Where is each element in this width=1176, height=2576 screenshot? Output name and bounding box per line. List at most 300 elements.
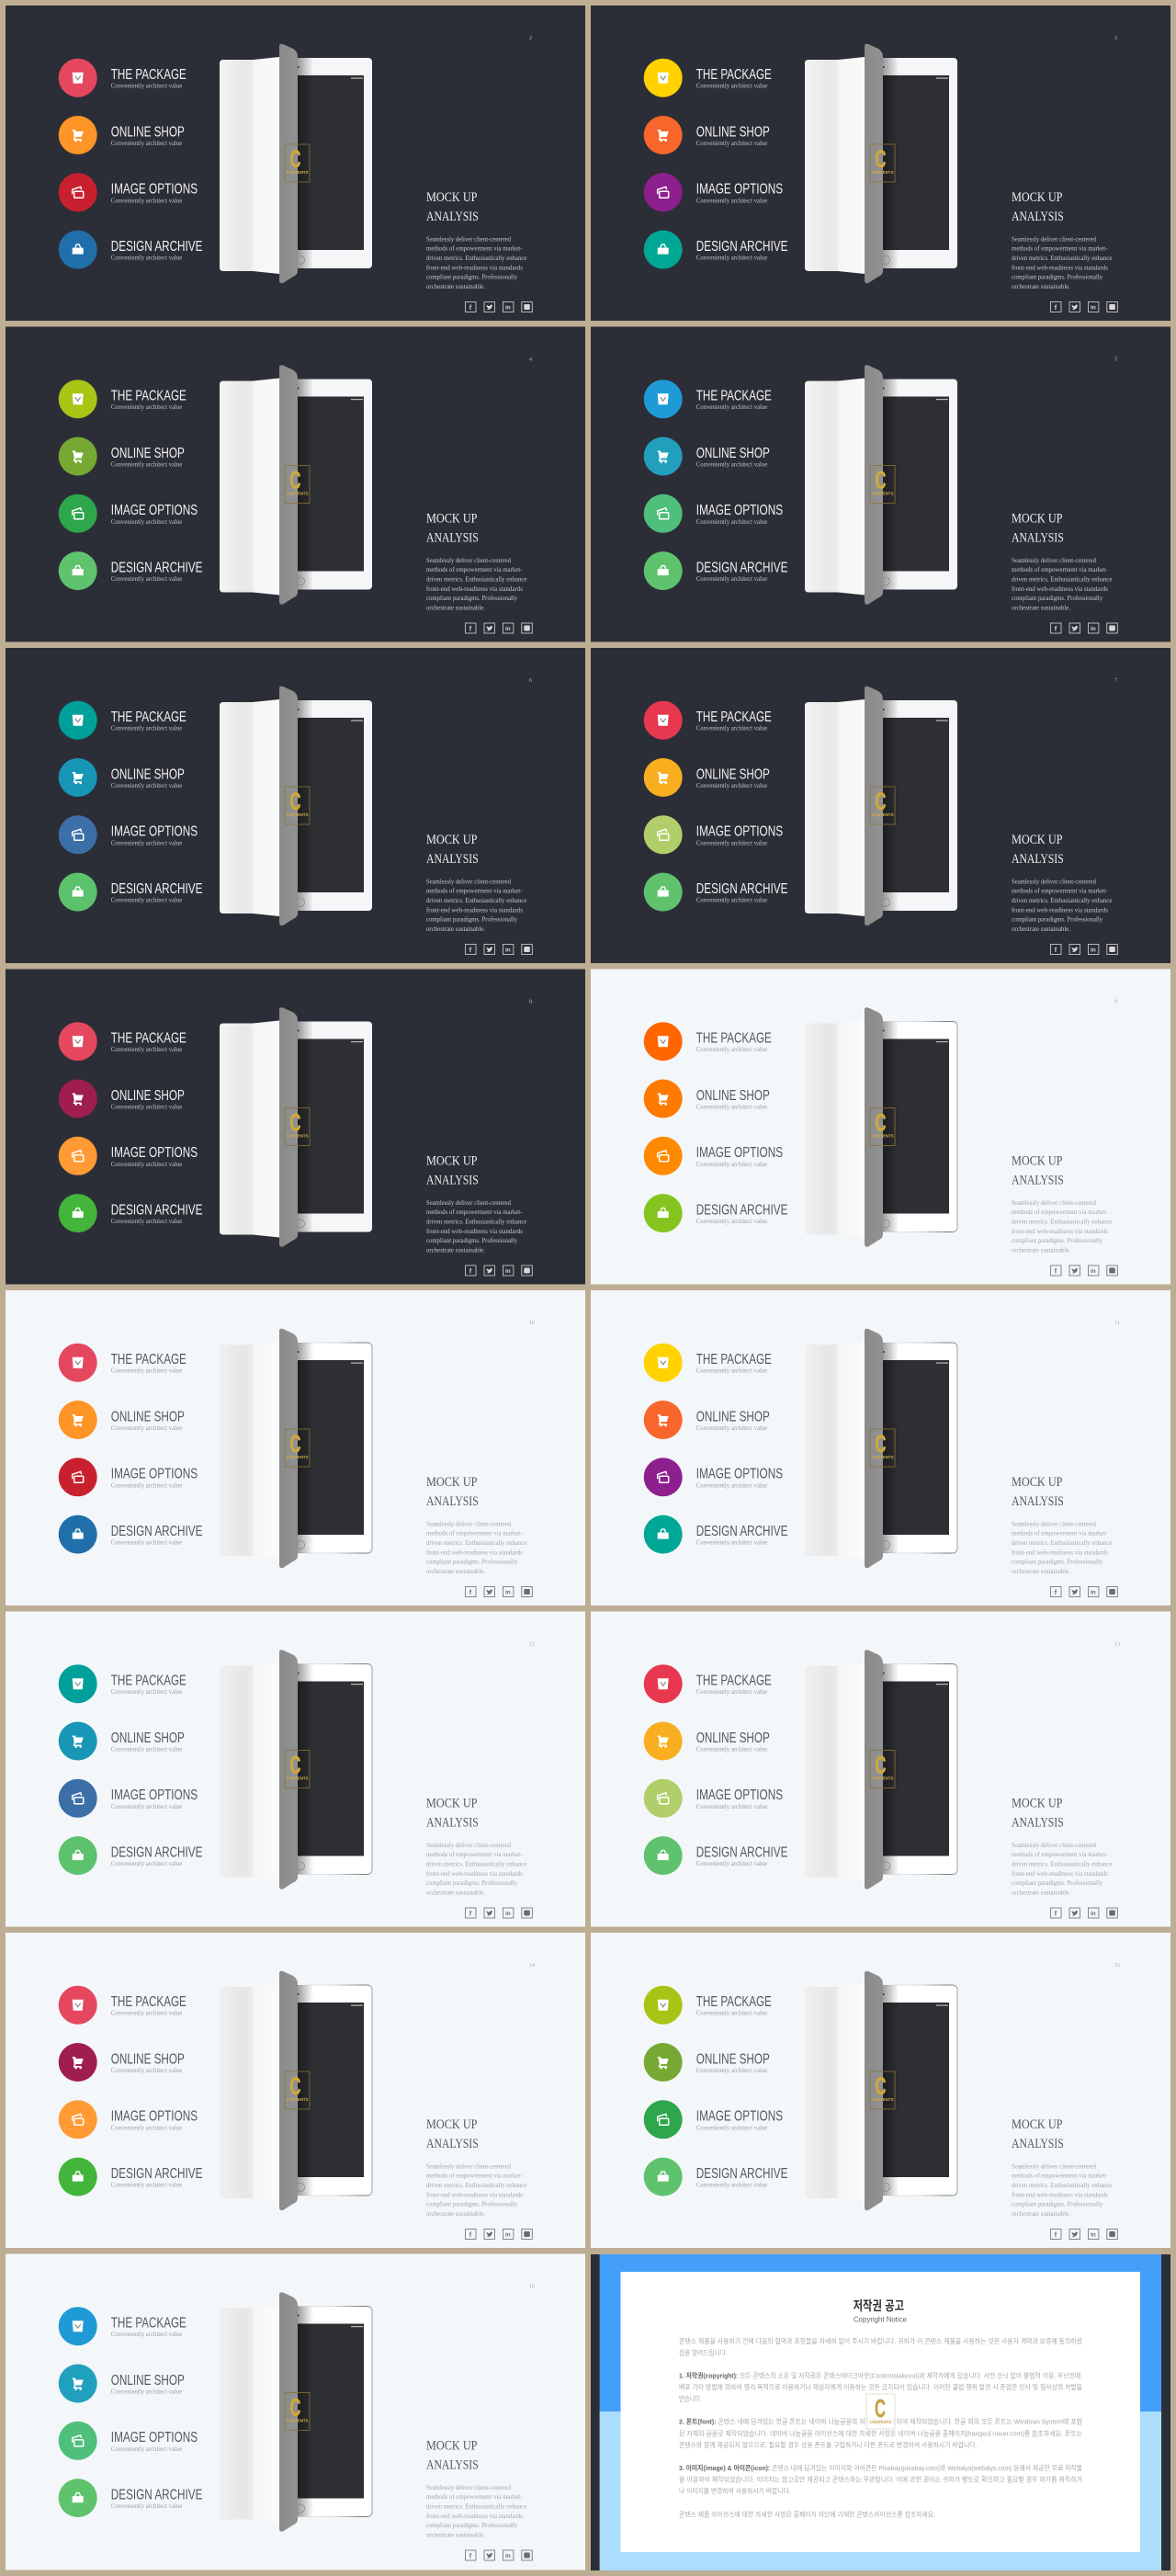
tablet mockup [220, 2292, 372, 2532]
text block: mock up analysis: MOCK UP [1012, 833, 1062, 847]
icon row: the package: Conveniently architect value [696, 2010, 767, 2017]
text block: mock up analysis: Seamlessly deliver client-centered [426, 1841, 511, 1849]
panel: slide 16 light [6, 2253, 585, 2570]
social icons [465, 1586, 532, 1597]
icon row: design archive: DESIGN ARCHIVE [111, 1844, 202, 1860]
icon row: online shop: Conveniently architect value [111, 2388, 182, 2395]
icon row: online shop [644, 1401, 770, 1439]
tablet mockup [805, 1650, 957, 1889]
panel: copyright notice [591, 2254, 1170, 2570]
title: copyright notice: Copyright Notice [854, 2314, 907, 2323]
icon row: the package: Conveniently architect value [111, 2331, 182, 2338]
icon row: design archive: Conveniently architect value [111, 2182, 182, 2189]
text block: mock up analysis: MOCK UP [1012, 1796, 1062, 1810]
text block: mock up analysis: ANALYSIS [1012, 1173, 1064, 1187]
icon row: online shop: ONLINE SHOP [696, 1409, 770, 1424]
icon row: design archive: Conveniently architect value [696, 1218, 767, 1225]
text block: mock up analysis: compliant paradigms. Professionally [426, 273, 517, 281]
text block: license note: 콘텐스 제품 라이선스에 대한 자세한 사항은 홈페이지 하단에 기재한 콘텐스라이선스를 참조하세요. [679, 2509, 935, 2518]
text block: mock up analysis: Seamlessly deliver client-centered [1012, 1841, 1096, 1849]
text block: mock up analysis: compliant paradigms. Professionally [426, 915, 517, 924]
panel: slide 11 light: 11 [1114, 1321, 1120, 1326]
icon row: online shop: Conveniently architect value [696, 1424, 767, 1432]
icon row: design archive: Conveniently architect value [111, 255, 182, 262]
text block: mock up analysis [426, 2439, 527, 2538]
text block: mock up analysis: orchestrate sustainable. [426, 2531, 485, 2538]
text block: mock up analysis: methods of empowerment via market- [426, 2172, 523, 2180]
text block: mock up analysis: methods of empowerment via market- [1012, 887, 1108, 895]
panel: slide 7 dark: 7 [1114, 678, 1117, 684]
icon row: image options: IMAGE OPTIONS [696, 1787, 783, 1803]
icon row: image options: IMAGE OPTIONS [111, 824, 198, 840]
text block: mock up analysis: methods of empowerment via market- [1012, 244, 1108, 253]
icon row: the package [644, 380, 772, 418]
text block: mock up analysis: ANALYSIS [1012, 852, 1064, 867]
text block: mock up analysis: front-end web-readiness via standards [1012, 2190, 1108, 2198]
text block: mock up analysis: front-end web-readiness via standards [426, 263, 523, 271]
text block: mock up analysis: Seamlessly deliver client-centered [426, 877, 511, 885]
icon row: image options [644, 1137, 783, 1175]
icon row: the package: THE PACKAGE [111, 709, 187, 725]
icon row: the package: THE PACKAGE [696, 1352, 772, 1367]
icon row: image options: IMAGE OPTIONS [111, 1145, 198, 1161]
icon row: online shop: ONLINE SHOP [111, 124, 185, 140]
icon row: online shop: Conveniently architect value [696, 461, 767, 469]
text block: mock up analysis: ANALYSIS [1012, 1816, 1064, 1831]
icon row: online shop: ONLINE SHOP [111, 446, 185, 461]
text block: mock up analysis [426, 1154, 527, 1254]
icon row: the package: THE PACKAGE [111, 1673, 187, 1689]
text block: mock up analysis [426, 833, 527, 933]
text block: mock up analysis: compliant paradigms. Professionally [426, 594, 517, 602]
icon row: image options: Conveniently architect value [111, 197, 182, 204]
icon row: online shop [644, 2043, 770, 2082]
panel: slide 11 light [591, 1290, 1170, 1606]
icon row: the package [59, 1986, 187, 2025]
text block: mock up analysis: driven metrics. Enthusiastically enhance [1012, 254, 1113, 262]
text block: mock up analysis: front-end web-readiness via standards [426, 1227, 523, 1235]
icon row: the package [59, 59, 187, 97]
text block: mock up analysis: MOCK UP [426, 1796, 478, 1810]
icon row: design archive [644, 1515, 787, 1554]
icon row: online shop: ONLINE SHOP [111, 1731, 185, 1746]
text block: mock up analysis: Seamlessly deliver client-centered [426, 556, 511, 564]
text block: mock up analysis: Seamlessly deliver client-centered [426, 2483, 511, 2491]
text block: mock up analysis: MOCK UP [1012, 1475, 1062, 1490]
text block: mock up analysis: methods of empowerment via market- [426, 2492, 523, 2501]
text block: mock up analysis: compliant paradigms. Professionally [426, 2200, 517, 2208]
logo stamp: CONTENTS [870, 2420, 891, 2424]
text block: mock up analysis: methods of empowerment via market- [426, 887, 523, 895]
icon row: online shop [59, 2364, 185, 2402]
panel: slide 4 dark [6, 327, 585, 641]
icon row: image options [59, 2100, 198, 2139]
text block: mock up analysis: Seamlessly deliver client-centered [426, 2162, 511, 2170]
text block: mock up analysis [426, 1796, 527, 1897]
icon row: the package: Conveniently architect value [111, 403, 182, 411]
icon row: image options [59, 173, 198, 211]
icon row: image options: Conveniently architect value [696, 1481, 767, 1489]
text block: mock up analysis: ANALYSIS [1012, 210, 1064, 224]
text block: mock up analysis: orchestrate sustainable. [426, 603, 485, 612]
icon row: online shop: ONLINE SHOP [111, 1409, 185, 1424]
icon row: image options: IMAGE OPTIONS [111, 2109, 198, 2125]
text block: mock up analysis: ANALYSIS [426, 1816, 479, 1831]
text block: font clause: 2. 폰트(font): 콘텐스 내에 담겨있는 한글 폰트는 네이버 나눔글꼴의 저작물을 이용하여 제작되었습니다. 한글 외의 모든 폰트는 Windows System에 포함 [679, 2417, 1082, 2426]
text block: copyright clause: 1. 저작권(copyright): 모든 콘텐스의 소유 및 저작권은 콘텐스테이크아웃(Contentstakeout)과 제작자에게 있습니다. 사전 승낙 없이 불법적 이용, 부난전매, [679, 2371, 1082, 2380]
icon row: the package: Conveniently architect value [696, 1367, 767, 1375]
text block: mock up analysis: orchestrate sustainable. [426, 282, 485, 290]
icon row: image options: Conveniently architect value [111, 518, 182, 526]
icon row: design archive: DESIGN ARCHIVE [111, 1524, 202, 1539]
icon row: the package [644, 701, 772, 740]
icon row: design archive: DESIGN ARCHIVE [111, 1202, 202, 1218]
icon row: online shop: Conveniently architect value [696, 140, 767, 147]
icon row: online shop [644, 1722, 770, 1761]
icon row: design archive: DESIGN ARCHIVE [696, 1524, 787, 1539]
panel: slide 10 light [6, 1290, 585, 1606]
text block: mock up analysis: ANALYSIS [426, 1173, 479, 1187]
icon row: image options: Conveniently architect value [111, 1481, 182, 1489]
text block: mock up analysis: Seamlessly deliver client-centered [1012, 877, 1096, 885]
text block: mock up analysis: ANALYSIS [426, 2137, 479, 2151]
text block: mock up analysis: methods of empowerment via market- [1012, 1850, 1108, 1858]
text block: mock up analysis: MOCK UP [426, 190, 478, 205]
text block: mock up analysis: compliant paradigms. Professionally [1012, 594, 1102, 602]
text block: mock up analysis: orchestrate sustainable. [426, 925, 485, 933]
text block: mock up analysis: Seamlessly deliver client-centered [1012, 2162, 1096, 2170]
text block: mock up analysis: methods of empowerment via market- [426, 1208, 523, 1216]
icon row: design archive: DESIGN ARCHIVE [696, 1844, 787, 1860]
text block: copyright clause: 받습니다. [679, 2394, 702, 2403]
icon row: the package: THE PACKAGE [696, 1673, 772, 1689]
text block: mock up analysis: MOCK UP [1012, 1154, 1062, 1169]
text block: mock up analysis: ANALYSIS [1012, 531, 1064, 546]
tablet mockup [805, 44, 957, 283]
icon row: online shop: Conveniently architect value [111, 461, 182, 469]
text block: mock up analysis: front-end web-readiness via standards [1012, 1548, 1108, 1556]
text block: mock up analysis: front-end web-readiness via standards [426, 905, 523, 914]
tablet mockup [805, 687, 957, 925]
text block: mock up analysis: MOCK UP [1012, 2117, 1062, 2132]
text block: mock up analysis: Seamlessly deliver client-centered [1012, 1198, 1096, 1207]
text block: mock up analysis: MOCK UP [426, 2439, 478, 2454]
panel: slide 3 dark: 3 [1114, 36, 1117, 41]
icon row: online shop [59, 116, 185, 154]
text block: mock up analysis [426, 1475, 527, 1575]
icon row: the package [59, 701, 187, 740]
panel: slide 3 dark [591, 6, 1170, 321]
icon row: the package [644, 1986, 772, 2025]
icon row: the package: Conveniently architect value [696, 1688, 767, 1696]
icon row: image options [59, 2422, 198, 2460]
icon row: online shop: ONLINE SHOP [696, 124, 770, 140]
text block: mock up analysis: orchestrate sustainable. [1012, 282, 1070, 290]
icon row: image options [644, 1458, 783, 1496]
text block: mock up analysis: front-end web-readiness via standards [1012, 905, 1108, 914]
icon row: design archive: Conveniently architect value [111, 2502, 182, 2510]
icon row: image options: IMAGE OPTIONS [696, 824, 783, 840]
panel: slide 12 light: 12 [529, 1641, 535, 1647]
logo stamp: C [875, 2394, 886, 2423]
panel: slide 13 light [591, 1612, 1170, 1926]
text block: mock up analysis: front-end web-readiness via standards [1012, 1869, 1108, 1878]
text block: mock up analysis: driven metrics. Enthusiastically enhance [1012, 575, 1113, 583]
text block: mock up analysis: driven metrics. Enthusiastically enhance [1012, 2181, 1113, 2189]
icon row: image options [59, 815, 198, 854]
text block: image and icon clause: 나 이미지를 변경하여 사용하시기 바랍니다. [679, 2486, 791, 2495]
text block: mock up analysis: MOCK UP [426, 2117, 478, 2132]
text block: mock up analysis: front-end web-readiness via standards [426, 584, 523, 593]
icon row: the package [59, 380, 187, 418]
text block: mock up analysis: compliant paradigms. Professionally [426, 2521, 517, 2529]
icon row: the package: THE PACKAGE [111, 1994, 187, 2010]
panel: slide 6 dark [6, 648, 585, 963]
icon row: design archive: Conveniently architect value [696, 1539, 767, 1547]
text block: mock up analysis [1012, 511, 1113, 612]
icon row: image options: Conveniently architect value [696, 839, 767, 846]
text block: image and icon clause: 을 이용하여 제작되었습니다. 이미지는 참고로만 제공되고 콘텐스와는 무관합니다. 이에 관한 권리는 귀하가 별도로 확인하고 필요할 경우 허가를 취득하거 [679, 2475, 1082, 2484]
social icons [1051, 1586, 1117, 1597]
text block: mock up analysis: methods of empowerment via market- [426, 565, 523, 573]
text block: copyright clause [679, 2371, 1082, 2403]
icon row: design archive [644, 231, 787, 269]
icon row: design archive [59, 2479, 202, 2517]
icon row: design archive: Conveniently architect value [111, 1218, 182, 1225]
icon row: online shop: Conveniently architect value [696, 1103, 767, 1110]
icon row: the package: THE PACKAGE [111, 2316, 187, 2331]
icon row: design archive: DESIGN ARCHIVE [696, 2166, 787, 2182]
text block: mock up analysis: orchestrate sustainable. [1012, 1888, 1070, 1897]
panel: slide 12 light [6, 1612, 585, 1926]
text block: mock up analysis: MOCK UP [1012, 511, 1062, 526]
text block: mock up analysis: MOCK UP [426, 511, 478, 526]
text block: mock up analysis: compliant paradigms. Professionally [1012, 2200, 1102, 2208]
text block: mock up analysis: orchestrate sustainable. [1012, 1246, 1070, 1254]
text block: mock up analysis: methods of empowerment via market- [426, 1529, 523, 1538]
icon row: online shop: Conveniently architect value [111, 1746, 182, 1753]
panel: slide 14 light: 14 [529, 1963, 535, 1969]
tablet mockup [805, 1971, 957, 2210]
panel: slide 15 light: 15 [1114, 1963, 1120, 1969]
tablet mockup [220, 1650, 372, 1889]
icon row: online shop: Conveniently architect value [696, 782, 767, 789]
text block: mock up analysis: driven metrics. Enthusiastically enhance [1012, 896, 1113, 904]
logo stamp [866, 2394, 895, 2429]
icon row: the package: THE PACKAGE [111, 67, 187, 83]
social icons [465, 301, 532, 312]
icon row: image options: Conveniently architect value [696, 2124, 767, 2131]
panel: slide 6 dark: 6 [529, 678, 532, 684]
icon row: image options: Conveniently architect value [696, 1161, 767, 1168]
text block: mock up analysis: methods of empowerment via market- [1012, 1208, 1108, 1216]
icon row: the package: THE PACKAGE [111, 1352, 187, 1367]
text block: mock up analysis [426, 511, 527, 612]
text block: image and icon clause [679, 2463, 1082, 2495]
icon row: image options: Conveniently architect value [111, 839, 182, 846]
text block: mock up analysis: compliant paradigms. Professionally [426, 1236, 517, 1244]
text block: mock up analysis: driven metrics. Enthusiastically enhance [426, 254, 527, 262]
text block: mock up analysis: methods of empowerment via market- [1012, 1529, 1108, 1538]
panel: slide 2 dark [6, 6, 585, 321]
text block: mock up analysis: Seamlessly deliver client-centered [1012, 234, 1096, 243]
text block: mock up analysis: driven metrics. Enthusiastically enhance [1012, 1538, 1113, 1547]
icon row: design archive: Conveniently architect value [111, 575, 182, 583]
text block: font clause [679, 2417, 1082, 2449]
tablet mockup [220, 1007, 372, 1247]
icon row: design archive: Conveniently architect value [696, 575, 767, 583]
tablet mockup [805, 1007, 957, 1247]
icon row: image options: IMAGE OPTIONS [696, 2109, 783, 2125]
icon row: the package: THE PACKAGE [696, 709, 772, 725]
text block: mock up analysis: front-end web-readiness via standards [1012, 584, 1108, 593]
text block: mock up analysis: driven metrics. Enthusiastically enhance [1012, 1860, 1113, 1867]
icon row: image options: IMAGE OPTIONS [111, 503, 198, 518]
icon row: design archive: Conveniently architect value [111, 897, 182, 904]
icon row: online shop [59, 1079, 185, 1118]
social icons [1051, 1265, 1117, 1276]
text block: mock up analysis: orchestrate sustainable. [1012, 1567, 1070, 1575]
panel: slide 13 light: 13 [1114, 1641, 1120, 1647]
icon row: design archive [59, 873, 202, 912]
icon row: image options: IMAGE OPTIONS [696, 503, 783, 518]
tablet mockup [220, 1971, 372, 2210]
text block: image and icon clause: 3. 이미지(image) & 아이콘(icon): 콘텐스 내에 담겨있는 이미지와 아이콘은 Pixabay(pixabay.com)와 Webalys(webalys.com) 등에서 제공한 무료 저작물 [679, 2463, 1082, 2472]
icon row: the package: THE PACKAGE [696, 67, 772, 83]
text block: mock up analysis: compliant paradigms. Professionally [1012, 1878, 1102, 1887]
icon row: design archive: DESIGN ARCHIVE [696, 560, 787, 575]
icon row: the package: Conveniently architect value [111, 2010, 182, 2017]
icon row: online shop: ONLINE SHOP [696, 446, 770, 461]
icon row: online shop: ONLINE SHOP [111, 2373, 185, 2389]
icon row: the package [59, 2307, 187, 2345]
panel: slide 14 light [6, 1933, 585, 2248]
icon row: online shop: Conveniently architect value [111, 1424, 182, 1432]
text block: mock up analysis [1012, 2117, 1113, 2218]
icon row: image options [644, 494, 783, 533]
icon row: the package: THE PACKAGE [111, 1031, 187, 1046]
icon row: design archive: Conveniently architect value [696, 255, 767, 262]
social icons [465, 623, 532, 633]
text block: mock up analysis: Seamlessly deliver client-centered [1012, 1519, 1096, 1527]
icon row: image options: Conveniently architect value [111, 2445, 182, 2453]
icon row: design archive [644, 873, 787, 912]
icon row: the package [59, 1344, 187, 1382]
icon row: the package: Conveniently architect value [696, 1046, 767, 1053]
tablet mockup [220, 1329, 372, 1568]
social icons [1051, 623, 1117, 633]
icon row: image options [644, 173, 783, 211]
icon row: the package [644, 1664, 772, 1703]
text block: font clause: 된 자체의 글꼴로 제작되었습니다. 네이버 나눔글꼴 라이선스에 대한 자세한 사항은 네이버 나눔글꼴 홈페이지(hangeul.naver.com)를 참조하세요. 폰트는 [679, 2428, 1082, 2437]
icon row: image options [644, 1779, 783, 1818]
social icons [1051, 1908, 1117, 1918]
social icons [1051, 2230, 1117, 2239]
icon row: the package: Conveniently architect value [696, 725, 767, 732]
text block: mock up analysis: ANALYSIS [1012, 2137, 1064, 2151]
text block: mock up analysis: Seamlessly deliver client-centered [1012, 556, 1096, 564]
icon row: design archive [59, 1836, 202, 1875]
text block: mock up analysis: orchestrate sustainable. [426, 1567, 485, 1575]
icon row: the package: THE PACKAGE [696, 388, 772, 404]
text block: font clause: 콘텐스와 함께 제공되지 않으므로, 필요할 경우 상용 폰트를 구입하거나 다른 폰트로 변경하여 사용하시기 바랍니다. [679, 2440, 978, 2449]
text block: mock up analysis: front-end web-readiness via standards [426, 2512, 523, 2520]
text block: mock up analysis: ANALYSIS [426, 531, 479, 546]
text block: mock up analysis: driven metrics. Enthusiastically enhance [426, 1538, 527, 1547]
text block: mock up analysis: ANALYSIS [426, 2457, 479, 2472]
icon row: online shop [59, 1401, 185, 1439]
icon row: the package: THE PACKAGE [696, 1031, 772, 1046]
text block: mock up analysis: front-end web-readiness via standards [426, 1548, 523, 1556]
icon row: design archive: DESIGN ARCHIVE [111, 239, 202, 255]
icon row: design archive [644, 551, 787, 590]
text block: mock up analysis: compliant paradigms. Professionally [1012, 1236, 1102, 1244]
text block: mock up analysis: compliant paradigms. Professionally [426, 1878, 517, 1887]
icon row: the package: Conveniently architect value [696, 403, 767, 411]
social icons [465, 2230, 532, 2239]
text block: mock up analysis [1012, 1796, 1113, 1897]
text block: mock up analysis: compliant paradigms. Professionally [1012, 1558, 1102, 1566]
social icons [1051, 945, 1117, 954]
icon row: online shop [59, 437, 185, 476]
text block: mock up analysis: driven metrics. Enthusiastically enhance [426, 1860, 527, 1867]
tablet mockup [805, 365, 957, 605]
text block: mock up analysis: methods of empowerment via market- [426, 1850, 523, 1858]
text block: mock up analysis: front-end web-readiness via standards [1012, 263, 1108, 271]
tablet mockup [220, 687, 372, 925]
icon row: design archive [644, 1194, 787, 1232]
icon row: image options: Conveniently architect value [111, 2124, 182, 2131]
icon row: image options: Conveniently architect value [111, 1161, 182, 1168]
panel: slide 9 light [591, 969, 1170, 1285]
text block: mock up analysis: Seamlessly deliver client-centered [426, 1198, 511, 1207]
text block: mock up analysis: front-end web-readiness via standards [426, 1869, 523, 1878]
text block: mock up analysis: ANALYSIS [426, 852, 479, 867]
icon row: image options: IMAGE OPTIONS [696, 1467, 783, 1482]
text block: mock up analysis: ANALYSIS [426, 210, 479, 224]
text block: mock up analysis: methods of empowerment via market- [426, 244, 523, 253]
icon row: online shop: Conveniently architect value [111, 2067, 182, 2074]
icon row: the package: Conveniently architect value [696, 83, 767, 90]
social icons [465, 2550, 532, 2560]
icon row: image options [59, 1458, 198, 1496]
icon row: the package: Conveniently architect value [111, 1046, 182, 1053]
text block: mock up analysis: driven metrics. Enthusiastically enhance [426, 2502, 527, 2511]
icon row: online shop [59, 1722, 185, 1761]
panel: slide 8 dark [6, 969, 585, 1285]
icon row: image options: IMAGE OPTIONS [696, 1145, 783, 1161]
text block: mock up analysis: driven metrics. Enthusiastically enhance [1012, 1217, 1113, 1226]
icon row: image options [644, 2100, 783, 2139]
icon row: image options [644, 815, 783, 854]
icon row: image options: IMAGE OPTIONS [111, 1787, 198, 1803]
panel: slide 10 light: 10 [529, 1321, 535, 1326]
icon row: the package [644, 1022, 772, 1061]
tablet mockup [220, 44, 372, 283]
panel: slide 15 light [591, 1933, 1170, 2248]
icon row: design archive: Conveniently architect value [696, 1860, 767, 1867]
panel: slide 5 dark: 5 [1114, 357, 1117, 362]
icon row: image options: Conveniently architect value [696, 518, 767, 526]
panel: slide 16 light: 16 [529, 2285, 535, 2290]
icon row: image options: IMAGE OPTIONS [111, 2430, 198, 2445]
text block: mock up analysis: driven metrics. Enthusiastically enhance [426, 1217, 527, 1226]
icon row: design archive: Conveniently architect value [111, 1860, 182, 1867]
panel: slide 4 dark: 4 [529, 357, 532, 362]
panel: slide 9 light: 9 [1114, 1000, 1117, 1005]
text block: mock up analysis [426, 190, 527, 290]
icon row: online shop: ONLINE SHOP [696, 2051, 770, 2067]
